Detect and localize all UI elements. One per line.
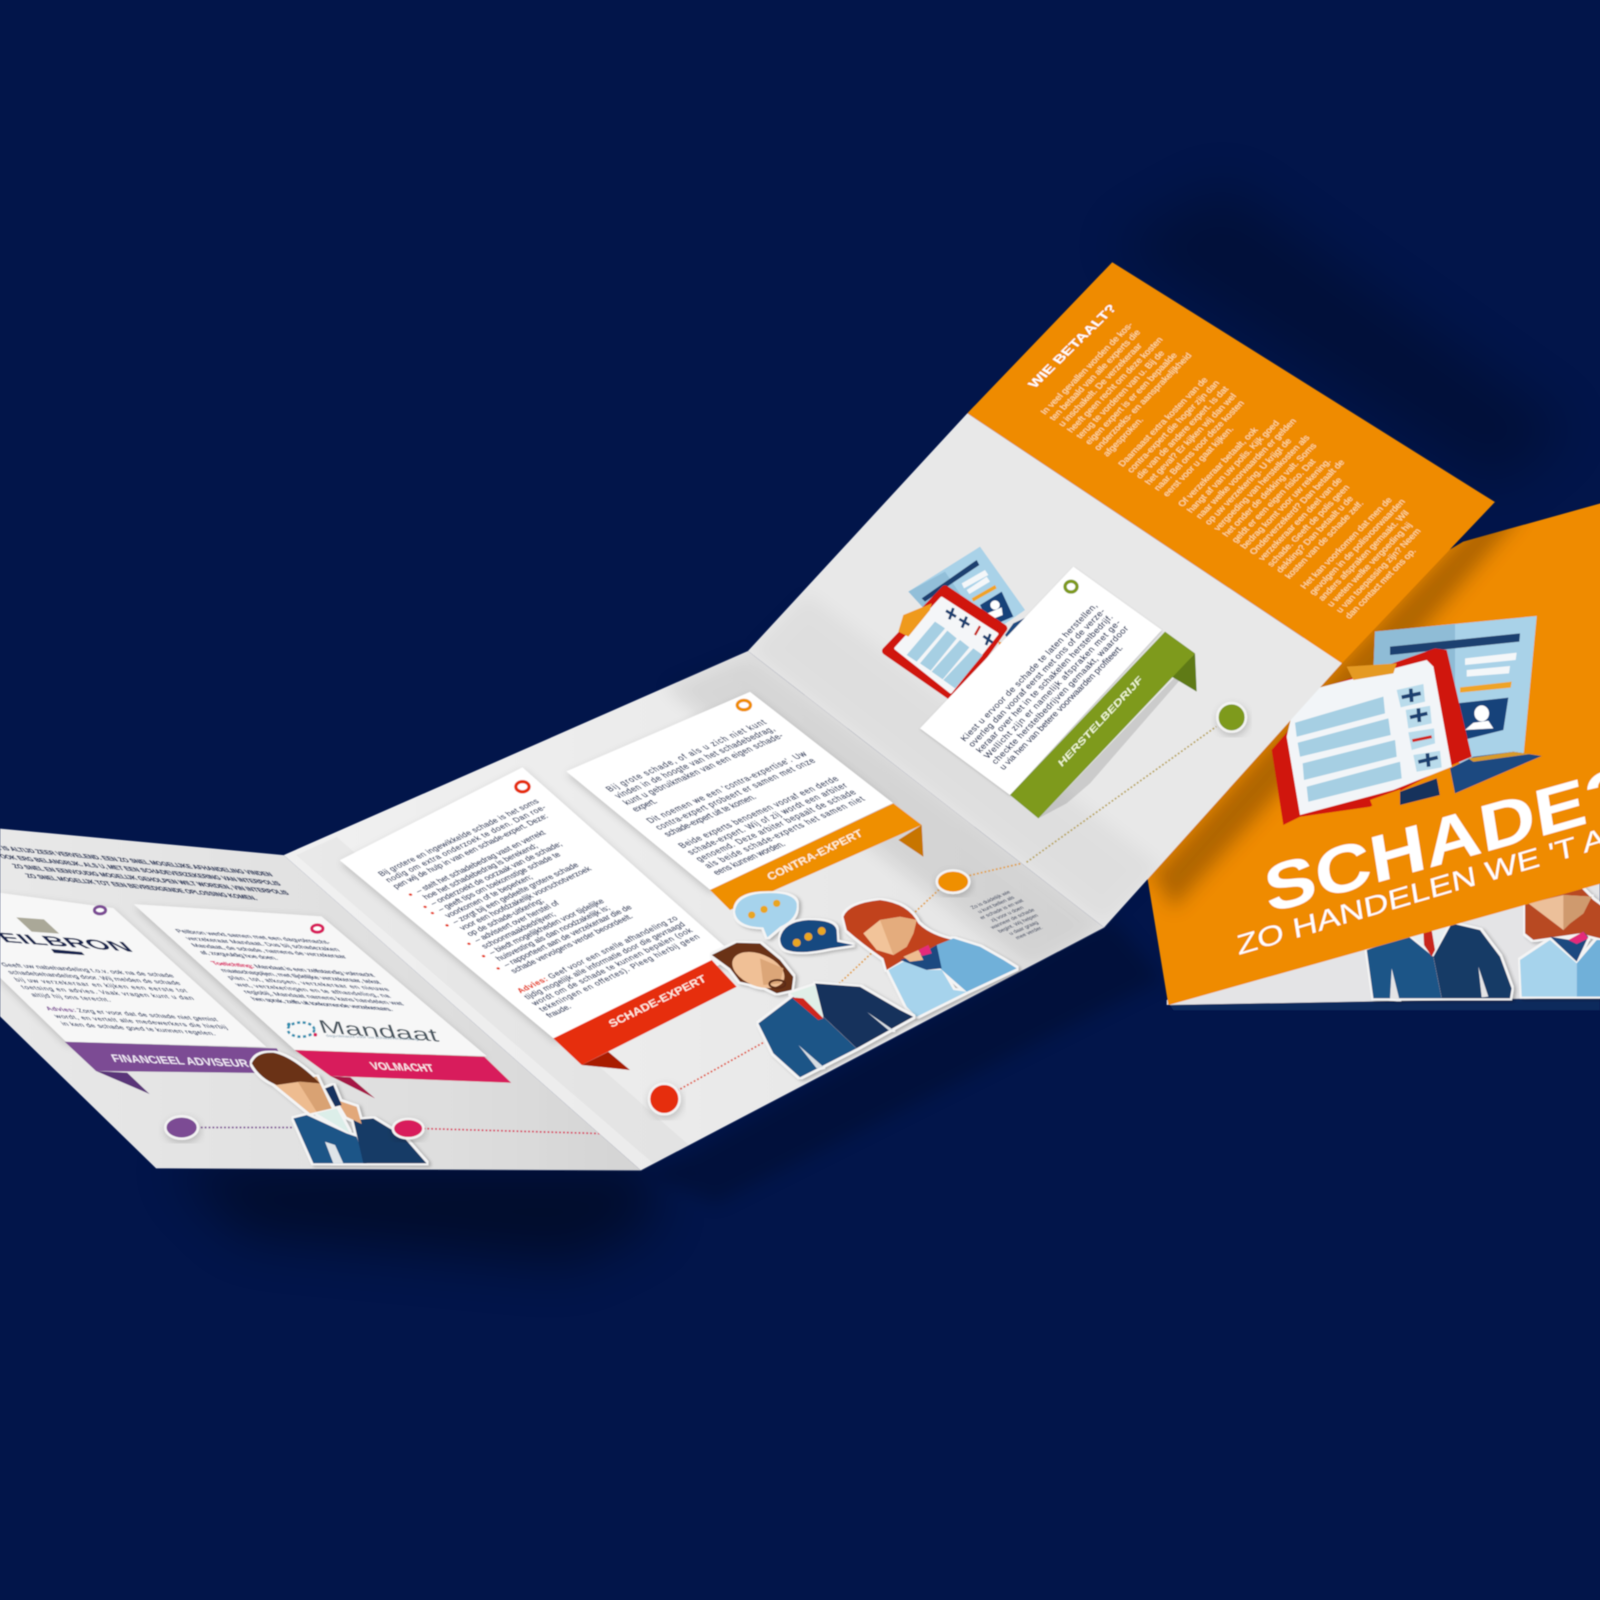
timeline node purple bbox=[165, 1116, 198, 1139]
speech bubble dark bbox=[780, 920, 853, 952]
cover brochure bbox=[1143, 502, 1600, 1010]
orange body copy: naar welke voorwaarden er gelden bbox=[1194, 417, 1298, 520]
schade-expert copy: – biedt mogelijkheden voor tijdelijke bbox=[487, 897, 607, 956]
orange body copy: anders afspraken gemaakt. Wil bbox=[1316, 509, 1411, 602]
orange body copy: Onderverzekerd? Dan betaalt de bbox=[1247, 458, 1347, 556]
card: financieel adviseur bbox=[0, 893, 266, 1047]
orange body copy: In veel gevallen worden de kos- bbox=[1038, 321, 1135, 416]
person on the phone bbox=[252, 1053, 427, 1163]
contra-expert copy: contra-expert probeert er samen met onze bbox=[652, 756, 818, 832]
orange body copy: afgesproken. bbox=[1101, 416, 1145, 458]
volmacht copy: maatschappijen, met tijdelijke verzekeraar, tekst bbox=[218, 967, 384, 985]
financial adviser copy: in ken de schade goed te kunnen regelen. bbox=[59, 1020, 218, 1037]
orange body copy: die van de andere expert. Is dat bbox=[1134, 384, 1231, 480]
volmacht copy: regiobij, Mandaat namens kans handelen wat bbox=[241, 989, 406, 1007]
schade-expert copy: Advies: Geef voor een snelle afhandeling zo bbox=[515, 914, 680, 995]
timeline node magenta bbox=[393, 1119, 423, 1138]
contra-expert copy: Beide experts benoemen vooraf een derde bbox=[676, 774, 841, 850]
cover icon: clipboard, form and pen bbox=[1272, 616, 1542, 825]
herstelbedrijf copy: overleg dan vooraf eerst met ons of de verze- bbox=[966, 607, 1107, 749]
main brochure unfolded bbox=[0, 262, 1495, 1170]
woman bbox=[843, 900, 1017, 1017]
orange body copy: bedrag komt voor uw rekening. bbox=[1238, 457, 1333, 550]
panel: orange wie betaalt bbox=[967, 262, 1495, 663]
cover orange front bbox=[1143, 502, 1600, 1005]
ribbon: financieel adviseur bbox=[65, 1042, 290, 1094]
logo stamp bbox=[16, 917, 59, 934]
orange body copy: Daarnaast extra kosten van de bbox=[1116, 375, 1210, 468]
panel: schade-expert and contra-expert bbox=[284, 651, 1104, 1170]
marker ring red bbox=[516, 782, 529, 792]
orange body copy: heeft geen recht om deze kosten bbox=[1065, 335, 1165, 434]
ribbon: contra-expert: CONTRA-EXPERT bbox=[765, 828, 865, 883]
orange body copy: u inschakelt. De verzekeraar bbox=[1056, 341, 1144, 428]
timeline node red bbox=[649, 1084, 680, 1114]
ribbon: volmacht bbox=[295, 1050, 511, 1098]
logo: Mandaat: Mandaat bbox=[316, 1017, 441, 1046]
card: contra-expert bbox=[566, 692, 893, 890]
contra-expert copy: schade-expert. Wij of zij wordt een arbiter bbox=[684, 781, 850, 856]
contra-expert copy: Bij grote schade, of als u zich niet kunt bbox=[603, 718, 769, 793]
schade-expert copy: – geeft tips om toekomstige schade te bbox=[435, 850, 563, 913]
orange body copy: Of verzekeraar betaalt, ook bbox=[1176, 425, 1260, 508]
orange body copy: ten betaald van alle experts die bbox=[1047, 328, 1142, 422]
volmacht copy: Peilbron werkt samen met een dagvolmacht- bbox=[173, 928, 333, 946]
schade-expert copy: op de schade-uitkering; bbox=[465, 897, 546, 938]
financial adviser copy: toetsing en advies. Vaak vragen kunt u dan bbox=[19, 984, 196, 1001]
orange body copy: naar. Bel ons voor deze kosten bbox=[1152, 399, 1246, 492]
orange body copy: contra-expert die hoger zijn dan bbox=[1125, 379, 1222, 474]
herstelbedrijf copy bbox=[958, 601, 1138, 772]
schade-expert copy: tekeningen en offertes). Pleeg hierbij geen bbox=[537, 933, 702, 1013]
herstelbedrijf copy: Wellicht zijn er namelijk afspraken met ge- bbox=[982, 618, 1123, 760]
ribbon: contra-expert bbox=[710, 803, 923, 910]
financial adviser copy: Geeft uw nabehandeling t.o.v. ook na de schade bbox=[0, 961, 176, 979]
herstelbedrijf copy: checkte herstelbedrijven gemaakt, waardoor bbox=[989, 624, 1130, 766]
small caption beside woman: mee verder. bbox=[1014, 925, 1045, 941]
schade-expert copy: wordt om de schade te kunnen bepalen (ook bbox=[529, 926, 695, 1007]
schade-expert copy: – stelt het schadebedrag vast en verrekt bbox=[413, 829, 548, 895]
small caption beside woman: zij voor u doen bbox=[989, 906, 1026, 923]
small caption beside woman: er schade is en wat bbox=[979, 898, 1026, 921]
cover inside page with people bbox=[1167, 877, 1600, 1005]
financial adviser copy bbox=[0, 961, 236, 1038]
small caption beside woman: Zo is duidelijk wie bbox=[970, 890, 1013, 911]
schade-expert copy: Bij grotere en ingewikkelde schade is het soms bbox=[376, 798, 541, 878]
man bbox=[712, 943, 913, 1077]
financial adviser copy: Advies: Zorg er voor dat de schade niet gemist bbox=[43, 1005, 221, 1023]
orange body copy: gevolgen in de polisvoorwaarden bbox=[1307, 497, 1407, 596]
ribbon: schade-expert: SCHADE-EXPERT bbox=[607, 973, 709, 1030]
contra-expert copy: genoemd. Deze arbiter bepaalt de schade bbox=[693, 788, 859, 863]
schade-expert copy: fraude. bbox=[544, 1003, 574, 1019]
heading: wie betaalt: WIE BETAALT? bbox=[1026, 302, 1120, 391]
dotted timeline centre bbox=[673, 862, 1027, 1093]
orange body copy: verzekeraar een deel van de bbox=[1256, 476, 1344, 562]
herstelbedrijf copy: Kiest u ervoor de schade te laten herstellen, bbox=[958, 601, 1099, 743]
financial adviser copy: bij uw verzekeraar en kijken een eerste tot bbox=[12, 976, 190, 994]
schade-expert copy: nodig om extra onderzoek te doen. Dan roe- bbox=[383, 804, 549, 884]
speech bubble light bbox=[735, 893, 797, 937]
volmacht copy bbox=[172, 928, 418, 1014]
contra-expert copy: vinden in de hoogte van het schadebedrag, bbox=[612, 725, 777, 800]
contra-expert copy: Dit noemen we een 'contra-expertise'. Uw bbox=[644, 749, 810, 825]
ribbon: schade-expert bbox=[553, 960, 737, 1070]
orange body copy: vergoeding van herstelkosten als bbox=[1212, 433, 1312, 532]
soft shadows on backdrop bbox=[173, 184, 1571, 1265]
card: herstelbedrijf bbox=[920, 567, 1162, 795]
financial adviser copy: altijd hij ons terecht. bbox=[28, 991, 113, 1003]
orange body copy: eerst voor u gaat kijken. bbox=[1161, 425, 1236, 498]
small caption beside woman bbox=[966, 889, 1053, 945]
intro text in capitals: ZO SNEL MOGELIJK TOT EEN BEVREDIGENDE OPLOSSING KOMEN. bbox=[23, 872, 260, 902]
contra-expert copy: eens kunnen worden. bbox=[710, 840, 788, 877]
logo: Mandaat: dagvolmacht voor uw schadeverzekering bbox=[325, 1034, 420, 1041]
schade-expert copy: schade vervolgens verder beoordeelt. bbox=[508, 913, 635, 975]
orange body copy: schade. Geeft de polis geen bbox=[1265, 483, 1352, 568]
volmacht copy: af, zorgvuldig hoe doen. bbox=[197, 949, 280, 961]
marker ring purple bbox=[94, 907, 106, 914]
volmacht copy: verzekeraar Mandaat. Dus bij schadezaken bbox=[183, 935, 342, 953]
cover illustration: woman bbox=[1520, 887, 1600, 997]
timeline node orange bbox=[937, 870, 969, 893]
orange body copy: u weten welke vergoeding hij bbox=[1325, 521, 1414, 608]
schade-expert copy: – adviseert over herstel of bbox=[472, 899, 562, 944]
small caption beside woman: begint. Wij helpen bbox=[997, 913, 1040, 934]
dotted timeline left bbox=[197, 1104, 653, 1134]
cover page edge bbox=[1168, 994, 1600, 1010]
schade-expert copy: tijdig mogelijk alle informatie door die gevraagd bbox=[522, 920, 688, 1001]
schade-expert copy: schoonmaakbedrijven; bbox=[479, 911, 558, 950]
panel: herstelbedrijf and wie betaalt bbox=[748, 262, 1495, 928]
schade-expert copy: voor een hoofdzakelijk voorschotverzoek bbox=[457, 865, 594, 932]
herstelbedrijf copy: keraar over het in te schakelen herstelbedrijf. bbox=[974, 613, 1115, 754]
schade-expert copy: hoe het schadebedrag is berekend; bbox=[421, 842, 540, 901]
orange body copy: op uw verzekering. U krijgt de bbox=[1203, 436, 1294, 526]
card: schade-expert bbox=[340, 767, 737, 1039]
marker ring magenta bbox=[312, 925, 323, 932]
contra-expert copy: als beide schade-experts het samen niet bbox=[701, 794, 868, 870]
ribbon: financieel adviseur: FINANCIEEL ADVISEUR bbox=[109, 1053, 252, 1070]
volmacht copy: Toelichting: Mandaat is een zelfstandig volmacht bbox=[209, 960, 378, 978]
small caption beside woman: wanneer de schade bbox=[989, 908, 1037, 931]
herstelbedrijf copy: u via hen van betere voorwaarden profiteert. bbox=[997, 643, 1125, 772]
orange body copy: dekking? Dan betaalt u de bbox=[1274, 494, 1355, 574]
orange body copy: het onder de dekking valt. Soms bbox=[1221, 441, 1319, 538]
volmacht copy: plan, tot, afkopen, verzekeraar en nieuwe bbox=[225, 974, 392, 992]
schade-expert copy bbox=[375, 797, 710, 1020]
ribbon: volmacht: VOLMACHT bbox=[368, 1061, 437, 1075]
intro text in capitals: ZO SNEL EN EENVOUDIG MOGELIJK GEHOLPEN WILT WORDEN, VIN INTERPOLIS bbox=[10, 862, 291, 897]
icon: clipboard, form and pen bbox=[886, 547, 1040, 698]
orange body copy: dan contact met ons op. bbox=[1343, 547, 1418, 620]
intro text in capitals bbox=[0, 840, 300, 906]
timeline node green bbox=[1217, 703, 1246, 732]
people illustration bbox=[712, 893, 1017, 1077]
orange body copy: u van toepassing zijn? Neem bbox=[1334, 527, 1423, 614]
panel: left panels financieel adviseur and volmacht bbox=[0, 829, 653, 1170]
schade-expert copy: voorkomen of te beperken; bbox=[443, 873, 535, 919]
cover illustration: man bbox=[1367, 923, 1512, 999]
ribbon: herstelbedrijf bbox=[1010, 632, 1197, 818]
orange body copy: kosten van de schade zelf. bbox=[1283, 499, 1366, 580]
orange body copy: het geval? Er kijken wij dan wel bbox=[1143, 392, 1238, 486]
contra-expert copy bbox=[603, 718, 876, 877]
dotted timeline right bbox=[1027, 727, 1216, 862]
financial adviser copy: schadebehandeling door. Wij melden de schade bbox=[5, 969, 183, 986]
ribbon: herstelbedrijf: HERSTELBEDRIJF bbox=[1057, 674, 1145, 769]
volmacht copy: wet, verzekeringen en te afhandeling, na bbox=[232, 981, 393, 999]
schade-expert copy: – zorgt bij een gedeelte grotere schade bbox=[450, 861, 581, 926]
volmacht copy: Mandaat, de schade, namens de verzekeraar bbox=[189, 942, 349, 960]
schade-expert copy: – onderzoekt de oorzaak van de schade; bbox=[428, 840, 564, 907]
orange body copy: geldt er een eigen risico. Dat bbox=[1229, 457, 1318, 544]
schade-expert copy: pen wij de hulp in van een schade-expert. Deze: bbox=[391, 812, 550, 890]
orange body copy bbox=[1038, 312, 1447, 620]
orange body copy: hangt af van uw polis. Kijk goed bbox=[1185, 419, 1281, 514]
schade-expert copy: huisvesting als dan noodzakelijk is; bbox=[494, 904, 612, 962]
orange body copy: onderzoeks- en aansprakelijkheid bbox=[1092, 351, 1194, 452]
contra-expert copy: kunt u gebruikmaken van een eigen schade- bbox=[620, 731, 786, 807]
card: volmacht bbox=[134, 904, 487, 1056]
financial adviser copy: wordt, en vertelt alle medewerkers die hierbij bbox=[51, 1013, 230, 1031]
orange body copy: eigen expert is er een bepaalde bbox=[1083, 351, 1179, 446]
volmacht copy: hen sprak, zelfs uit toekomende verzekeraars. bbox=[249, 996, 395, 1012]
orange body copy: terug te vorderen van u. Bij de bbox=[1074, 349, 1166, 440]
contra-expert copy: expert. bbox=[629, 797, 660, 813]
marker ring orange bbox=[737, 700, 751, 710]
small caption beside woman: u kunt bellen als bbox=[977, 895, 1017, 915]
contra-expert copy: schade-expert uit te komen. bbox=[661, 793, 759, 838]
schade-expert copy: – rapporteert aan de verzekeraar die de bbox=[501, 903, 635, 969]
marker ring green bbox=[1065, 581, 1077, 592]
orange body copy: Het kan voorkomen dat men de bbox=[1298, 496, 1394, 590]
small caption beside woman: u daar graag bbox=[1008, 920, 1040, 937]
shadow cast on the cover by the open brochure bbox=[1153, 502, 1520, 908]
